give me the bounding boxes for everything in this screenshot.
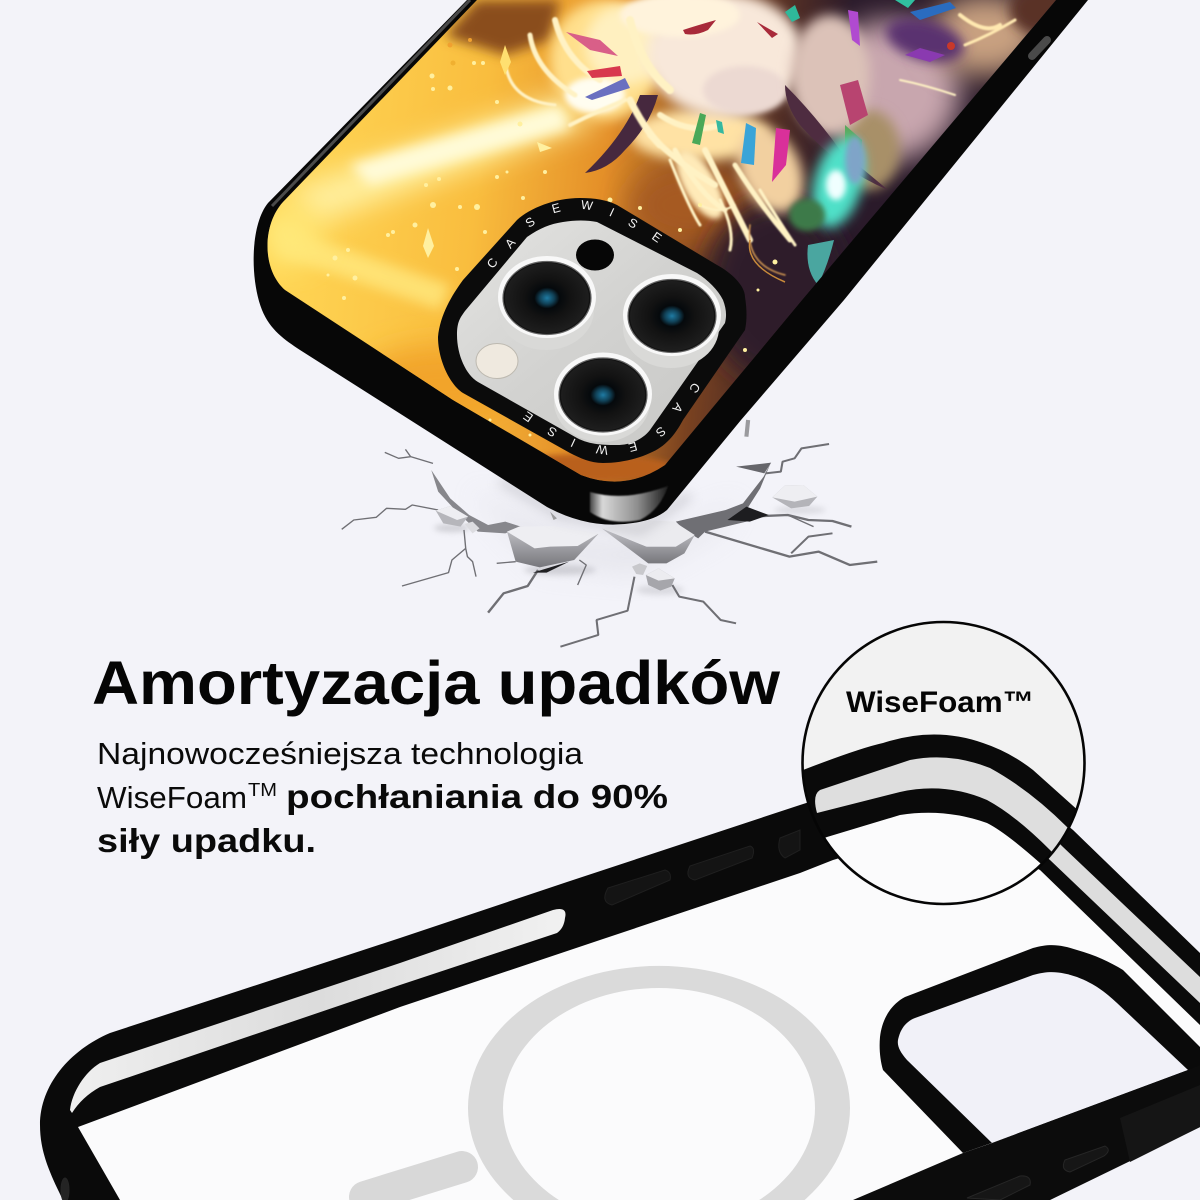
- case black frame: [40, 760, 1200, 1200]
- corner gloss: [590, 486, 668, 522]
- description text: pochłaniania do 90%: [286, 778, 668, 815]
- sparks: [326, 38, 778, 436]
- description text: WiseFoam: [97, 780, 247, 815]
- feather strokes: [505, 15, 1015, 275]
- brand lettering: W: [595, 442, 609, 457]
- crystals: [566, 0, 956, 285]
- callout: WiseFoam magnifier: [801, 620, 1086, 906]
- brand lettering: I: [569, 435, 578, 450]
- brand lettering: E: [521, 408, 536, 425]
- case artwork: [250, 0, 1070, 500]
- cracked wall impact: [342, 420, 877, 647]
- glow patches: [355, 0, 1070, 482]
- magnified backdrop: [802, 622, 1084, 904]
- lower button and port: [61, 1146, 1108, 1200]
- lens 2: [623, 274, 721, 368]
- side gap left: [70, 909, 566, 1113]
- lens 1: [498, 256, 596, 350]
- rock fragments: [436, 485, 817, 591]
- brand lettering: E: [627, 439, 639, 454]
- light rays: [260, 95, 600, 310]
- title: Amortyzacja upadków: [92, 649, 781, 717]
- crack lines: [342, 420, 877, 647]
- description text: siły upadku.: [97, 822, 316, 859]
- lower frame texture: [1120, 1085, 1200, 1162]
- brand lettering: E: [550, 201, 562, 216]
- brand lettering: S: [653, 424, 668, 440]
- magnet pill: [365, 1167, 462, 1197]
- side gap right: [1010, 805, 1200, 1003]
- case outer body: [254, 0, 1088, 525]
- side buttons: [605, 830, 800, 905]
- creature body: [550, 0, 969, 226]
- brand lettering: C: [686, 380, 703, 395]
- description text: TM: [248, 780, 277, 800]
- crack soft shadows: [434, 490, 826, 595]
- brand lettering: W: [580, 198, 594, 213]
- brand lettering: I: [607, 205, 616, 220]
- brand lettering: S: [523, 214, 538, 231]
- brand lettering: S: [545, 423, 560, 440]
- callout: WiseFoam magnifier: WiseFoam™: [846, 686, 1034, 719]
- crack shadow wedges: [431, 463, 771, 573]
- lens 3: [554, 352, 652, 442]
- brand lettering: E: [649, 229, 664, 246]
- upper left bevel: [272, 0, 470, 206]
- flash: [476, 344, 518, 378]
- camera frame: [880, 945, 1200, 1153]
- brand lettering: C: [484, 256, 501, 271]
- description text: [97, 736, 668, 859]
- case interior: [78, 825, 1200, 1200]
- brand lettering: A: [502, 235, 519, 251]
- microphone hole: [576, 240, 614, 270]
- phone with colourful case: [250, 0, 1088, 530]
- lower frame: [853, 1065, 1200, 1200]
- clear case: [40, 760, 1200, 1200]
- camera opening: [898, 972, 1188, 1143]
- camera island: [438, 198, 746, 463]
- contact shadow: [500, 480, 690, 530]
- brand lettering: [484, 198, 703, 457]
- camera plate: [457, 220, 726, 445]
- brand lettering: A: [669, 400, 686, 416]
- brand lettering: S: [625, 215, 640, 232]
- magnet ring: [468, 966, 850, 1200]
- magnified case corner: [804, 734, 1076, 902]
- side button: [1032, 40, 1047, 56]
- description text: Najnowocześniejsza technologia: [97, 736, 584, 771]
